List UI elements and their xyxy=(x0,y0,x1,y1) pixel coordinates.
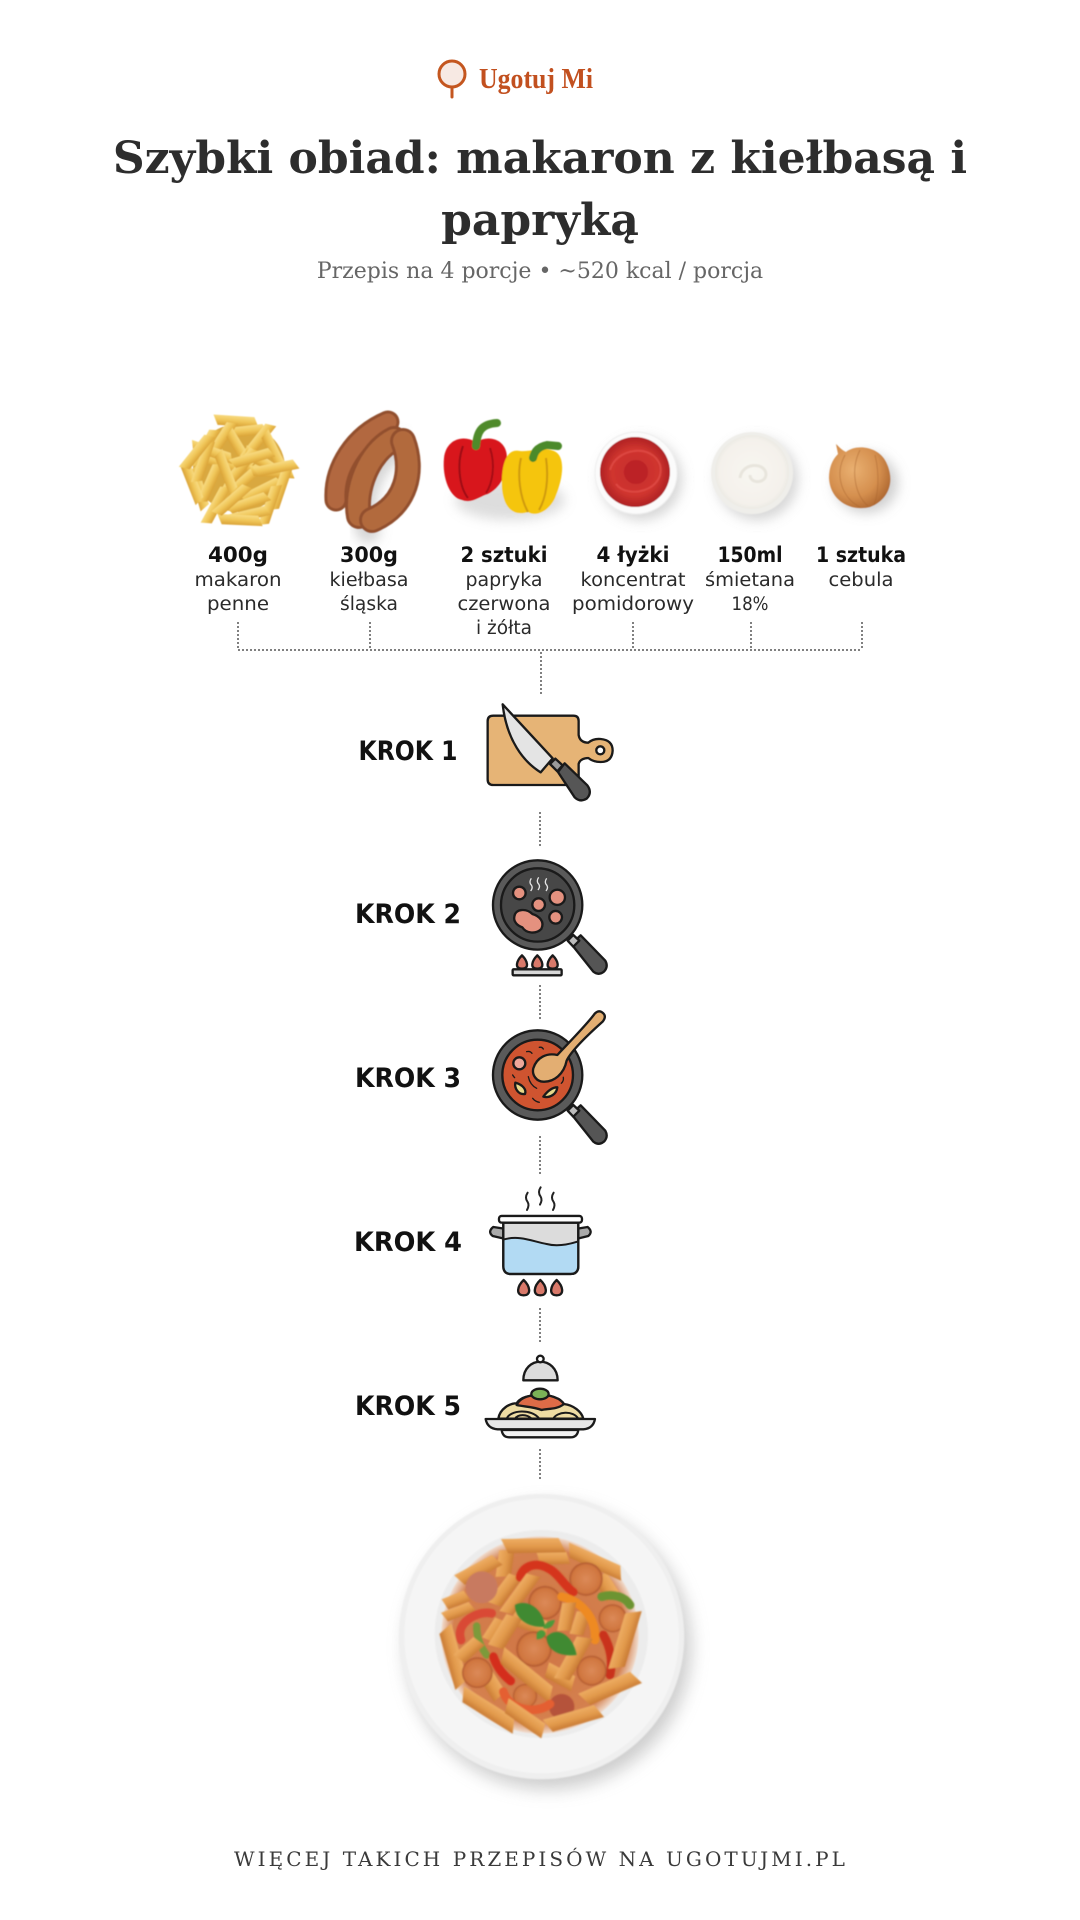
basil leaves xyxy=(515,1603,577,1655)
icon: onion xyxy=(829,444,898,513)
icon: sausages xyxy=(336,422,408,531)
ingredient label: pasta: makaron xyxy=(194,570,282,591)
icon: logo spoon xyxy=(439,61,465,97)
ingredient label: peppers: papryka xyxy=(466,570,542,591)
ingredient label: peppers: i żółta xyxy=(476,618,532,639)
title: papryką xyxy=(441,195,639,246)
icon: sour cream bowl xyxy=(711,432,798,520)
step 2 xyxy=(355,860,607,975)
step connectors xyxy=(539,812,541,1479)
logo wordmark: Ugotuj Mi xyxy=(479,64,593,95)
step label: KROK 3 xyxy=(355,1063,461,1094)
ingredient label: tomato paste xyxy=(572,543,694,615)
ingredient label: sausage: kiełbasa xyxy=(330,570,408,591)
step label: KROK 1 xyxy=(358,736,458,767)
ingredient label: peppers xyxy=(458,543,550,639)
ingredient label: tomato paste: 4 łyżki xyxy=(596,543,670,567)
ingredient connector lines xyxy=(238,622,862,694)
ingredient label: onion xyxy=(816,543,906,591)
ingredient label: peppers: 2 sztuki xyxy=(460,543,548,567)
icon: penne pasta xyxy=(178,414,300,528)
icon: served spaghetti with cloche xyxy=(486,1356,595,1437)
ingredient label: cream: 150ml xyxy=(718,543,782,567)
ingredient label: pasta xyxy=(194,543,282,615)
step label: KROK 4 xyxy=(354,1227,462,1258)
icon: boiling pot xyxy=(490,1187,591,1295)
penne, sausage, peppers xyxy=(438,1538,643,1739)
title: Szybki obiad: makaron z kiełbasą i xyxy=(113,133,967,184)
final dish: pasta plate xyxy=(399,1494,691,1789)
ingredient label: cream: 18% xyxy=(732,594,768,615)
icon: tomato paste bowl xyxy=(595,432,682,520)
ingredient label: sausage: śląska xyxy=(340,594,398,615)
ingredient label: pasta: penne xyxy=(207,594,269,615)
step 5 xyxy=(355,1356,595,1437)
red pepper xyxy=(444,423,507,501)
icon: cutting board and knife xyxy=(488,704,613,800)
step 4 xyxy=(354,1187,591,1295)
ingredient label: onion: cebula xyxy=(828,570,894,591)
plate xyxy=(399,1494,684,1779)
yellow pepper xyxy=(502,445,562,514)
footer: WIĘCEJ TAKICH PRZEPISÓW NA UGOTUJMI.PL xyxy=(234,1846,848,1871)
subtitle: Przepis na 4 porcje • ~520 kcal / porcja xyxy=(317,259,763,284)
ingredient label: cream: śmietana xyxy=(705,570,795,591)
ingredient label: pasta: 400g xyxy=(208,543,268,567)
panel: ingredients xyxy=(178,414,906,639)
icon: pan with tomato sauce and spoon xyxy=(493,1011,607,1144)
plate shadow xyxy=(406,1504,691,1789)
step label: KROK 2 xyxy=(355,899,461,930)
ingredient label: tomato paste: pomidorowy xyxy=(572,594,694,615)
step 3 xyxy=(355,1011,607,1144)
ingredient label: sausage: 300g xyxy=(340,543,398,567)
icon: bell peppers xyxy=(444,423,565,520)
step label: KROK 5 xyxy=(355,1391,461,1422)
ingredient label: sausage xyxy=(330,543,408,615)
step 1 xyxy=(358,704,613,800)
ingredient label: peppers: czerwona xyxy=(458,594,550,615)
icon: frying pan with sausage on burner xyxy=(493,860,607,975)
logo xyxy=(439,61,593,97)
ingredient label: tomato paste: koncentrat xyxy=(580,570,686,591)
ingredient label: onion: 1 sztuka xyxy=(816,543,906,567)
ingredient label: cream xyxy=(705,543,795,615)
